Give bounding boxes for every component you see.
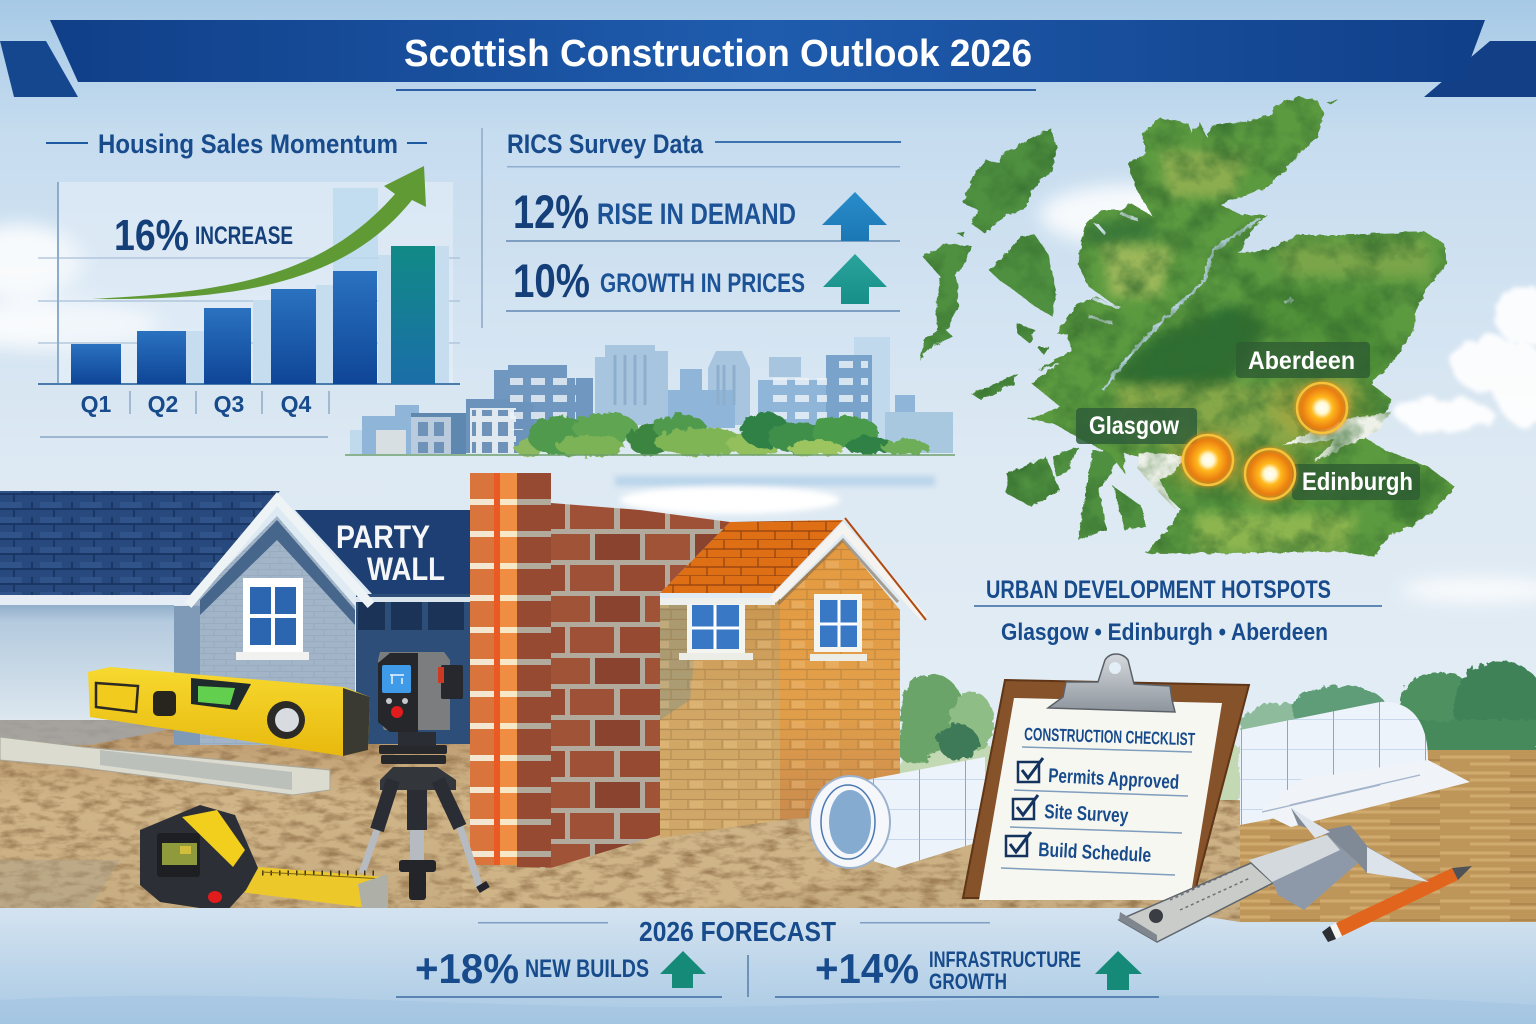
stat: 16% increase: INCREASE	[195, 222, 293, 250]
stat: new builds: NEW BUILDS	[525, 955, 649, 983]
mainland	[1026, 96, 1455, 557]
urban development hotspots	[974, 576, 1382, 646]
map of Scotland	[919, 90, 1481, 570]
tape measure	[140, 805, 388, 912]
caliper and pencil	[1119, 808, 1472, 942]
stat: new builds: +18%	[415, 945, 519, 992]
caliper	[1119, 808, 1429, 942]
brick party wall	[462, 473, 890, 908]
marker: Aberdeen: Aberdeen	[1248, 347, 1355, 375]
heading: 2026 forecast: 2026 FORECAST	[639, 916, 836, 947]
checklist text: Site Survey	[1044, 801, 1129, 827]
icon: up arrow new builds	[660, 951, 706, 988]
axis labels	[81, 391, 312, 417]
sign: party wall: WALL	[367, 551, 445, 587]
stat: infrastructure growth: GROWTH	[929, 969, 1007, 994]
axis labels: Q4	[281, 391, 312, 417]
axis labels: Q3	[214, 391, 244, 417]
marker: Glasgow	[1076, 408, 1238, 490]
bar chart	[38, 166, 460, 438]
icon: up arrow infrastructure	[1095, 951, 1142, 990]
distant trees	[895, 661, 1536, 815]
stat: 10% growth in prices	[513, 254, 805, 307]
orange house	[655, 518, 926, 838]
checklist text: CONSTRUCTION CHECKLIST	[1024, 724, 1195, 749]
panel: RICS survey data	[481, 128, 901, 328]
laser on tripod	[362, 652, 488, 900]
stat: 12% rise in demand: 12%	[513, 185, 589, 238]
window	[236, 578, 309, 660]
stat: infrastructure growth	[815, 945, 1081, 994]
sign: party wall: PARTY	[336, 519, 430, 555]
city skyline	[345, 337, 955, 457]
sign: party wall	[295, 510, 470, 744]
window	[687, 604, 745, 653]
stat: 10% growth in prices: GROWTH IN PRICES	[600, 268, 805, 298]
icon: up arrow blue	[822, 192, 887, 241]
yellow spirit level	[0, 667, 370, 795]
stat: infrastructure growth: +14%	[815, 945, 919, 992]
stat: 10% growth in prices: 10%	[513, 254, 590, 307]
stat: 16% increase	[114, 211, 293, 260]
axis labels: Q1	[81, 391, 112, 417]
stat: 16% increase: 16%	[114, 211, 189, 260]
axis labels: Q2	[148, 391, 178, 417]
clouds right of map	[1397, 285, 1536, 433]
clipboard checklist	[963, 654, 1249, 900]
marker: Glasgow: Glasgow	[1089, 412, 1179, 440]
checklist text	[1001, 724, 1195, 875]
stat: new builds	[415, 945, 649, 992]
marker: Edinburgh: Edinburgh	[1302, 468, 1413, 496]
heading: RICS: RICS Survey Data	[507, 129, 704, 159]
trees	[514, 412, 929, 457]
title: Scottish Construction Outlook 2026	[404, 33, 1032, 75]
urban development hotspots: URBAN DEVELOPMENT HOTSPOTS	[986, 576, 1331, 604]
urban development hotspots: Glasgow • Edinburgh • Aberdeen	[1001, 619, 1328, 646]
trend arrow	[92, 166, 426, 299]
panel: housing sales momentum	[38, 129, 460, 438]
clip	[1048, 654, 1175, 712]
pencil	[1322, 866, 1472, 942]
checklist text: Build Schedule	[1038, 839, 1152, 867]
title banner	[0, 20, 1536, 97]
islands	[919, 100, 1339, 540]
stat: infrastructure growth: INFRASTRUCTURE	[929, 947, 1081, 972]
water: firths and lochs	[1139, 412, 1392, 510]
checklist text: Permits Approved	[1048, 765, 1180, 794]
stat: 12% rise in demand: RISE IN DEMAND	[597, 198, 796, 231]
stat: 12% rise in demand	[513, 185, 796, 238]
icon: up arrow teal	[823, 254, 887, 304]
marker: Edinburgh	[1240, 444, 1420, 504]
marker: Aberdeen	[1236, 342, 1370, 438]
bottom strip	[0, 908, 1536, 1024]
ground and site	[0, 716, 1536, 925]
heading: housing sales: Housing Sales Momentum	[98, 129, 398, 159]
landmass	[919, 90, 1481, 570]
blueprints	[810, 702, 1470, 868]
left house	[0, 491, 470, 745]
